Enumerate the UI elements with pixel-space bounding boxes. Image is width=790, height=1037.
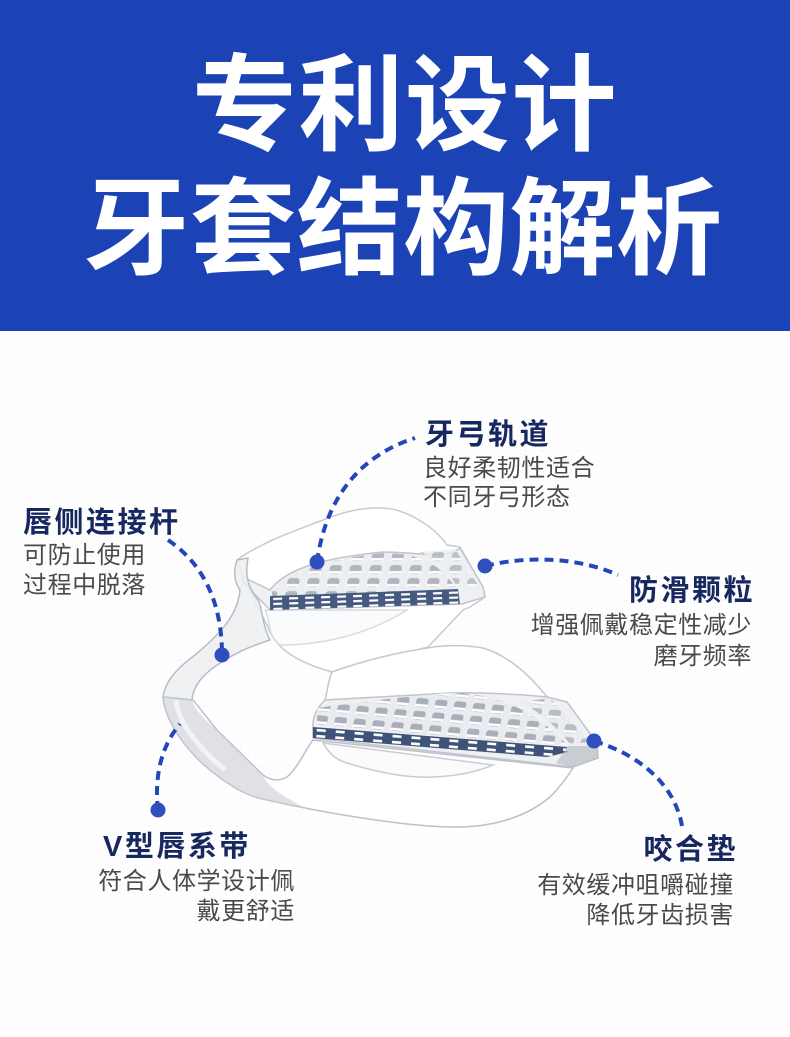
label: 防滑颗粒: 防滑颗粒	[629, 574, 755, 607]
upper dark mesh band	[270, 589, 460, 610]
mouthguard illustration	[163, 508, 598, 827]
label: 唇侧连接杆: 过程中脱落	[23, 572, 146, 599]
callout line: 咬合垫	[594, 741, 682, 826]
label: 咬合垫: 有效缓冲咀嚼碰撞	[537, 872, 734, 899]
label: 防滑颗粒	[531, 574, 755, 670]
label: V型唇系带: 符合人体学设计佩	[98, 868, 295, 895]
label: 咬合垫	[537, 833, 738, 929]
upper strap	[163, 558, 270, 700]
label: V型唇系带: V型唇系带	[103, 830, 251, 863]
label: 牙弓轨道: 不同牙弓形态	[423, 484, 571, 511]
title: 牙套结构解析	[84, 171, 722, 289]
label: 防滑颗粒: 磨牙频率	[654, 643, 752, 670]
lower tray end cap	[556, 746, 598, 767]
upper tray bump grid	[272, 553, 457, 596]
upper tray body	[243, 548, 485, 610]
label: 咬合垫: 咬合垫	[643, 833, 738, 866]
lower tray body	[313, 693, 598, 767]
lower rear flange	[325, 646, 598, 767]
callout line: V型唇系带	[157, 724, 180, 810]
label: 牙弓轨道: 良好柔韧性适合	[423, 455, 595, 482]
lower front flange	[163, 697, 573, 827]
label: 牙弓轨道: 牙弓轨道	[425, 418, 551, 451]
callout line: 防滑颗粒	[485, 560, 618, 575]
callout line: 唇侧连接杆	[168, 540, 222, 655]
label: V型唇系带	[98, 830, 295, 925]
lower tray right end bumps	[520, 698, 590, 744]
upper rear flange	[237, 508, 485, 672]
label: 唇侧连接杆: 可防止使用	[23, 542, 146, 569]
upper tray right end bumps	[420, 549, 478, 590]
title: 专利设计	[192, 48, 618, 165]
callout line: 牙弓轨道	[317, 438, 415, 562]
label: 唇侧连接杆: 唇侧连接杆	[23, 506, 181, 539]
label: 牙弓轨道	[423, 418, 595, 511]
label: V型唇系带: 戴更舒适	[197, 898, 295, 925]
label: 防滑颗粒: 增强佩戴稳定性减少	[531, 612, 752, 639]
lower dark mesh band	[313, 727, 568, 757]
upper rear lobe below tray	[265, 610, 407, 645]
lower strap shading	[163, 697, 305, 808]
lower tray bump grid	[317, 693, 567, 745]
title	[84, 48, 722, 289]
lower lobe below tray	[323, 743, 493, 777]
callout dots	[150, 554, 602, 818]
header banner	[0, 0, 790, 331]
label: 咬合垫: 降低牙齿损害	[586, 902, 734, 929]
label: 唇侧连接杆	[23, 506, 181, 599]
strap highlight	[176, 700, 225, 770]
